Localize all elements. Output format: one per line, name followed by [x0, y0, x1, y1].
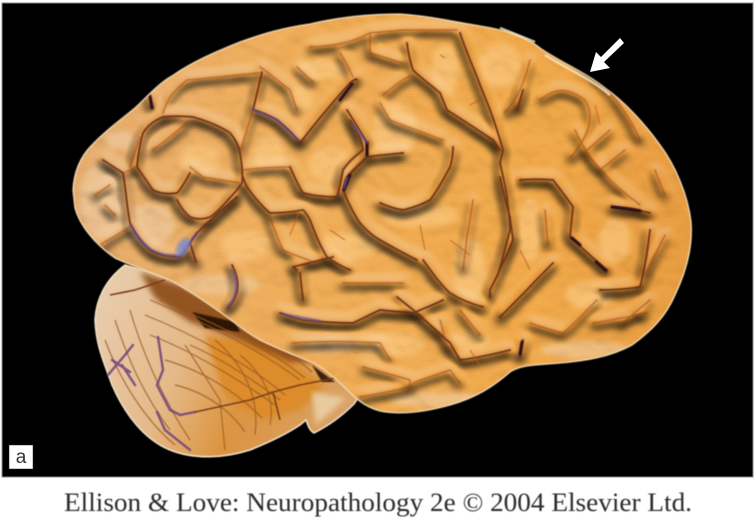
dark sulcus lines [103, 33, 650, 360]
caption: Ellison & Love: Neuropathology 2e © 2004 Elsevier Ltd. [64, 487, 692, 517]
cortical surface with gyri and sulci [73, 14, 691, 413]
sulcus shadow [90, 30, 665, 397]
pale meninges edge [500, 28, 610, 95]
arrow pointing at cortex [590, 38, 624, 72]
paler left lobe [80, 130, 630, 408]
pale rim of cortex [73, 14, 691, 413]
bright blue patch [174, 236, 192, 258]
panel label a [9, 445, 33, 469]
purple vessel sulci [130, 110, 367, 321]
cerebrum [73, 14, 691, 413]
cerebellum [95, 265, 358, 457]
brain specimen [73, 14, 691, 457]
red-brown vessels [290, 55, 632, 365]
deep dark fissures [150, 84, 640, 354]
embossed relief of gyri [90, 30, 665, 397]
fine sulcus lines [90, 30, 665, 397]
base cortex colour [73, 14, 691, 413]
gyri highlights [180, 43, 631, 357]
panel label a: a [16, 447, 27, 468]
